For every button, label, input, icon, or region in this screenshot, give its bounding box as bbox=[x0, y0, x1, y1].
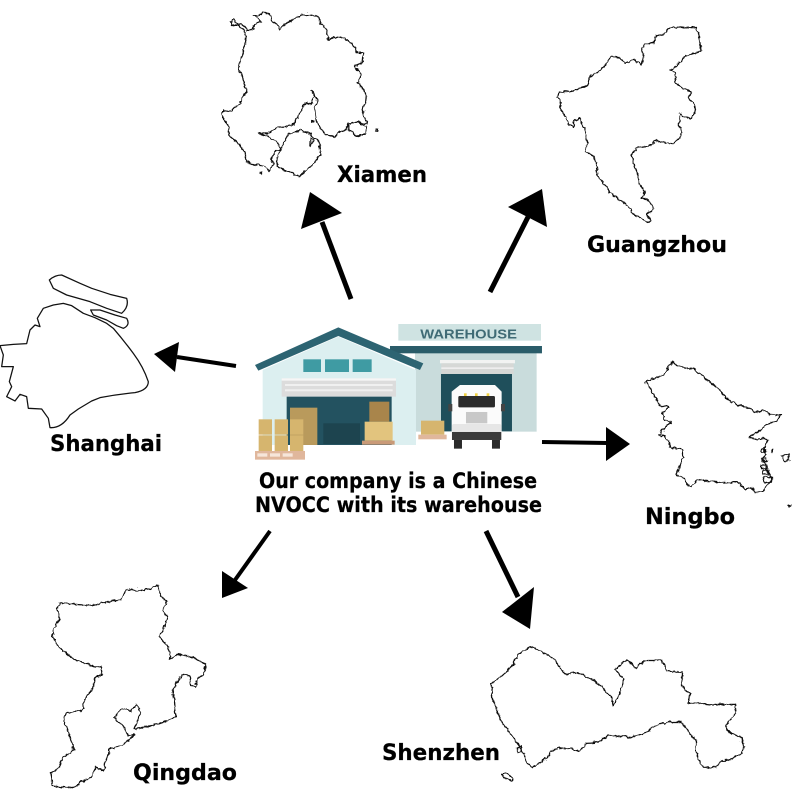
arrow to Shanghai bbox=[154, 342, 236, 372]
map: Guangzhou outline bbox=[556, 26, 701, 222]
arrow to Shenzhen bbox=[486, 531, 534, 629]
caption: company description: NVOCC with its warehouse bbox=[255, 493, 542, 518]
arrow to Qingdao bbox=[222, 531, 270, 598]
label: Qingdao: Qingdao bbox=[133, 760, 237, 786]
caption: company description bbox=[255, 469, 542, 518]
map: Qingdao outline bbox=[49, 584, 205, 787]
label: Ningbo: Ningbo bbox=[645, 504, 735, 530]
map: Shanghai outline bbox=[0, 275, 148, 428]
arrow to Xiamen bbox=[301, 192, 351, 299]
label: Shenzhen: Shenzhen bbox=[382, 740, 500, 766]
label: Xiamen: Xiamen bbox=[337, 162, 427, 188]
arrow to Ningbo bbox=[542, 427, 630, 461]
warehouse illustration bbox=[255, 324, 542, 460]
main building bbox=[255, 327, 423, 445]
warehouse sign: WAREHOUSE bbox=[420, 326, 517, 341]
arrow to Guangzhou bbox=[490, 189, 547, 292]
stacked cargo boxes bbox=[255, 402, 447, 460]
map: Xiamen outline bbox=[222, 12, 376, 175]
map: Ningbo outline bbox=[645, 361, 790, 507]
label: Guangzhou: Guangzhou bbox=[587, 232, 727, 258]
delivery truck bbox=[448, 385, 505, 449]
map: Shenzhen outline bbox=[491, 646, 743, 780]
warehouse sign bbox=[398, 324, 541, 341]
right building bbox=[390, 346, 542, 432]
label: Shanghai: Shanghai bbox=[50, 431, 162, 457]
caption: company description: Our company is a Chinese bbox=[259, 469, 537, 494]
